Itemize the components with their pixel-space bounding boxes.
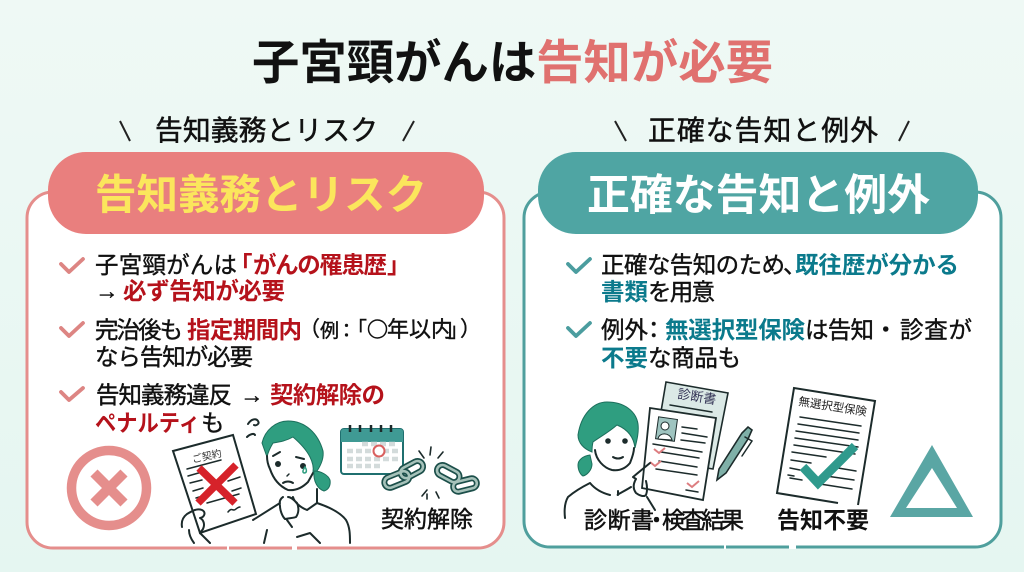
bullet text: left: 「 <box>347 318 367 341</box>
bullet text: left: 必ず告知が必要 <box>123 277 285 304</box>
icon: cross in circle <box>72 450 146 526</box>
bullet text: left: 例 <box>320 320 339 342</box>
bullet text: left: 子宮頸がんは <box>95 252 237 278</box>
bullet text: left: 契約解除の <box>270 382 385 408</box>
illustration: contract with red cross <box>173 435 256 543</box>
icon: triangle <box>890 445 973 517</box>
bullet text: right: 例外 <box>601 317 648 343</box>
bullet text: right: 書類 <box>601 279 648 305</box>
bullet text: right: は告知 <box>805 317 874 343</box>
bullet text: right: 不要 <box>601 345 648 371</box>
label: no disclosure needed: 告知不要 <box>777 507 869 533</box>
label: medical certificate and test results: 診断書 <box>584 507 654 533</box>
illustration: contract with red cross: ご契約 <box>191 447 223 466</box>
subheading: right: 正確な告知と例外 <box>648 115 878 146</box>
illustration: woman with documents <box>565 382 752 518</box>
bullet text: left: 」 <box>448 320 468 342</box>
bullet text: right: を用意 <box>648 279 715 305</box>
heading pill: right <box>538 152 978 234</box>
bullet text: right: 診査が <box>900 317 972 343</box>
illustration: no-disclosure document <box>777 388 875 505</box>
illustration: broken chain <box>383 447 478 499</box>
bullet text: right: ： <box>642 317 666 343</box>
label: medical certificate and test results: 検査結果 <box>662 507 744 533</box>
icon: open circle in example <box>368 320 386 338</box>
bullet text: left: ： <box>337 321 356 342</box>
bullet text: left: ） <box>460 318 481 341</box>
bullet text: right: 正確な告知のため <box>601 252 785 278</box>
bullet text: left: 告知義務違反 <box>96 382 232 408</box>
heading pill: right: 正確な告知と例外 <box>587 172 930 220</box>
title: 子宮頸がんは告知が必要 <box>252 36 773 89</box>
bullet text: left: 」 <box>387 252 410 278</box>
illustration: worried woman <box>247 419 350 543</box>
bullet text: left: なら告知が必要 <box>95 344 253 370</box>
bullet text: left: → <box>240 382 264 408</box>
bullet text: right: 無選択型保険 <box>665 317 806 343</box>
bullet text: left: ペナルティ <box>95 410 200 436</box>
bullet text: right: な商品も <box>648 345 741 371</box>
illustration: woman with documents: 診断書 <box>677 386 717 407</box>
bullet text: left: 年以内 <box>387 317 453 342</box>
bullet text: left: 「 <box>229 252 252 278</box>
check icons: right <box>568 259 590 336</box>
bullet text: right: 、 <box>783 252 806 278</box>
label: medical certificate and test results: ・ <box>645 507 668 533</box>
bullet text: left: も <box>201 410 224 436</box>
bullet text: left <box>95 251 481 436</box>
bullet text: right: ・ <box>874 317 898 343</box>
heading pill: left <box>48 152 484 234</box>
bullet text: left: → <box>95 278 118 304</box>
bullet text: right: 既往歴が分かる <box>795 251 959 278</box>
label: contract cancellation: 契約解除 <box>381 506 473 532</box>
panel: right <box>524 152 1001 549</box>
heading pill: left: 告知義務とリスク <box>95 171 427 218</box>
bullet text: left: 指定期間内 <box>187 317 302 343</box>
bullet text: right <box>601 251 972 371</box>
illustration: no-disclosure document: 無選択型保険 <box>798 394 868 419</box>
subheading: left: 告知義務とリスク <box>155 115 378 146</box>
bullet text: left: 完治後も <box>95 317 183 343</box>
check icons: left <box>61 259 83 400</box>
woman <box>565 402 655 518</box>
pen <box>717 427 752 480</box>
bullet text: left: （ <box>299 318 320 341</box>
bullet text: left: がんの罹患歴 <box>253 251 387 278</box>
label: medical certificate and test results <box>584 507 744 533</box>
panel: left <box>27 152 504 550</box>
illustration: calendar <box>341 425 403 474</box>
